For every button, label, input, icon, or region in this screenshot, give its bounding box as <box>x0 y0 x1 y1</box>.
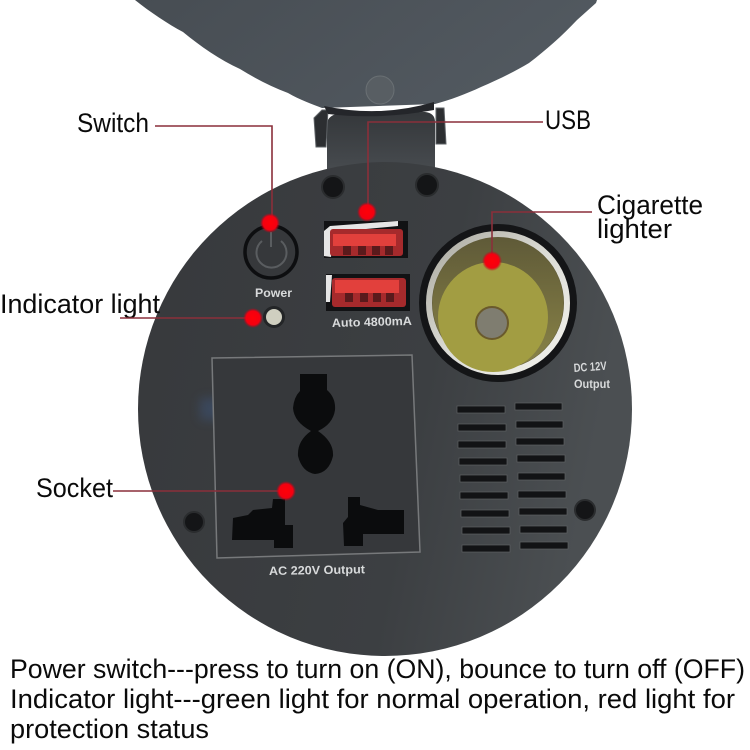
leader line <box>492 212 592 260</box>
red dot <box>243 308 263 328</box>
USB caption: Auto 4800mA <box>332 314 412 330</box>
center pin <box>476 307 508 339</box>
label: USB <box>545 105 591 135</box>
red dot <box>260 213 280 233</box>
callout: Indicator light <box>0 289 263 328</box>
left column <box>457 406 510 552</box>
port frame <box>324 221 408 258</box>
chrome ring <box>429 234 567 372</box>
label: Switch <box>77 108 149 138</box>
label line 1: Cigarette <box>597 190 703 220</box>
Power caption: Power <box>255 286 292 300</box>
indicator LED <box>263 306 285 328</box>
outer recess <box>419 224 577 382</box>
callout: Socket <box>36 473 296 503</box>
port red body <box>332 278 406 307</box>
port red tongue <box>333 234 396 246</box>
port metal <box>324 221 398 257</box>
port red tongue <box>335 280 399 293</box>
button ring <box>245 226 297 278</box>
line 2: Indicator light---green light for normal operation, red light for <box>10 684 735 714</box>
power button <box>245 226 297 278</box>
device: inverter panel <box>135 0 632 656</box>
AC caption: AC 220V Output <box>269 562 365 578</box>
hinge <box>314 102 446 170</box>
label: Indicator light <box>0 289 160 319</box>
screw bottom right <box>575 500 595 520</box>
line 1: Power switch---press to turn on (ON), bounce to turn off (OFF) <box>10 654 745 684</box>
hinge tab <box>327 112 435 170</box>
hinge left bracket <box>314 110 328 147</box>
body disc <box>138 162 632 656</box>
LED lens <box>266 309 282 325</box>
blue smudge <box>200 398 288 420</box>
bottom right hole <box>343 497 404 546</box>
lid <box>135 0 597 108</box>
top pin hole <box>293 374 335 474</box>
cup interior <box>432 238 564 368</box>
description text <box>10 654 745 744</box>
screw top right <box>416 174 438 196</box>
USB port 1 <box>324 221 408 258</box>
port contacts <box>343 246 393 255</box>
port frame <box>326 274 410 311</box>
port contacts <box>345 293 394 302</box>
port red body <box>330 229 403 256</box>
screw top left <box>322 176 344 198</box>
line 3: protection status <box>10 714 209 744</box>
leader line <box>155 126 272 222</box>
leader line <box>120 317 253 319</box>
bottom left hole <box>232 499 293 548</box>
cigarette lighter socket <box>419 224 577 382</box>
port metal <box>326 275 332 302</box>
red dot <box>357 202 377 222</box>
label line 2: lighter <box>597 214 672 244</box>
hinge right bracket <box>436 108 446 144</box>
base disk <box>438 262 548 372</box>
screw bottom left <box>184 512 204 532</box>
panel frame <box>212 355 420 558</box>
leader line <box>368 122 543 212</box>
red dot <box>276 481 296 501</box>
DC caption: DC 12V <box>573 359 607 375</box>
AC socket panel <box>212 355 420 558</box>
Output caption: Output <box>574 377 610 391</box>
LED housing <box>263 306 285 328</box>
leader line <box>113 490 286 492</box>
callout: Cigarette lighter <box>482 190 703 271</box>
power symbol <box>256 232 286 268</box>
label: Socket <box>36 473 113 503</box>
callout: Switch <box>77 108 280 233</box>
right column <box>515 403 568 549</box>
USB port 2 <box>326 274 410 311</box>
red dot <box>482 251 502 271</box>
lid stamp mark <box>366 76 394 104</box>
hinge gap <box>324 102 434 116</box>
ventilation slots <box>457 403 568 552</box>
callout: USB <box>357 105 591 222</box>
